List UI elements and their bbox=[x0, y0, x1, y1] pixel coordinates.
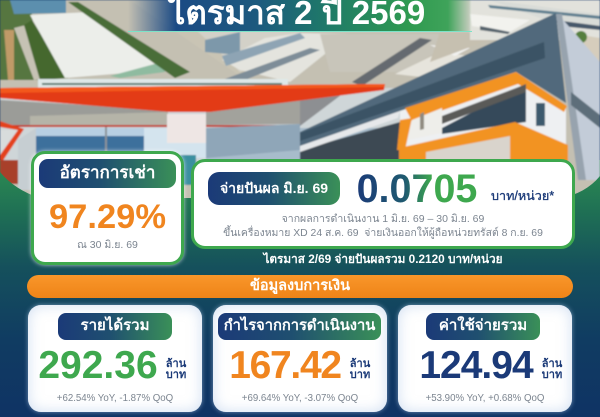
panel: total expenses bbox=[398, 305, 572, 412]
building right bbox=[206, 128, 378, 159]
heading: total revenue: รายได้รวม bbox=[81, 317, 149, 334]
heading: financial data bar: ข้อมูลงบการเงิน bbox=[250, 278, 350, 294]
heading: total revenue bbox=[58, 313, 172, 340]
value: profit: 167.42 bbox=[229, 344, 341, 387]
heading: operating profit: กำไรจากการดำเนินงาน bbox=[224, 318, 375, 334]
note: as of date: ณ 30 มิ.ย. 69 bbox=[77, 239, 138, 251]
heading: total expenses: ค่าใช้จ่ายรวม bbox=[439, 317, 527, 334]
text: XD and payment dates: ขึ้นเครื่องหมาย XD 24 ส.ค. 69 จ่ายเงินออกให้ผู้ถือหน่วยทรัสต์ 8 ก.ย. 69 bbox=[223, 228, 543, 239]
unit: baht per unit: บาท/หน่วย* bbox=[491, 189, 554, 203]
heading: financial data bar bbox=[27, 275, 573, 298]
note: revenue change: +62.54% YoY, -1.87% QoQ bbox=[57, 393, 173, 404]
unit: million baht: ล้าน bbox=[350, 358, 370, 370]
panel: distribution bbox=[191, 159, 575, 249]
gate and canopy bbox=[0, 88, 401, 162]
note: expenses change: +53.90% YoY, +0.68% QoQ bbox=[426, 393, 544, 404]
heading: total expenses bbox=[426, 313, 540, 340]
value: distribution per unit: 0.0705 bbox=[357, 167, 477, 211]
panel: total revenue bbox=[28, 305, 202, 412]
unit: million baht: บาท bbox=[350, 369, 370, 381]
heading: occupancy rate: อัตราการเช่า bbox=[60, 163, 155, 182]
unit: million baht: บาท bbox=[542, 369, 562, 381]
background gradient bbox=[0, 160, 600, 417]
text: operating period: จากผลการดำเนินงาน 1 มิ.ย. 69 – 30 มิ.ย. 69 bbox=[282, 213, 484, 225]
panel: occupancy rate bbox=[31, 151, 184, 265]
unit: million baht bbox=[166, 358, 186, 381]
unit: million baht bbox=[350, 358, 370, 381]
value: expenses: 124.94 bbox=[419, 344, 533, 387]
unit: million baht bbox=[542, 358, 562, 381]
note: profit change: +69.64% YoY, -3.07% QoQ bbox=[242, 393, 358, 404]
unit: million baht: ล้าน bbox=[166, 358, 186, 370]
unit: million baht: ล้าน bbox=[542, 358, 562, 370]
unit: million baht: บาท bbox=[166, 369, 186, 381]
heading: occupancy rate bbox=[39, 159, 176, 188]
value: revenue: 292.36 bbox=[38, 344, 158, 387]
photo: logistics warehouse bbox=[0, 0, 600, 198]
aerial ground bbox=[0, 0, 600, 205]
value: occupancy: 97.29% bbox=[49, 198, 166, 236]
panel: operating profit bbox=[213, 305, 387, 412]
text: Q2 total distribution: ไตรมาส 2/69 จ่ายปันผลรวม 0.2120 บาท/หน่วย bbox=[263, 252, 503, 266]
heading: distribution June 69 bbox=[208, 172, 340, 205]
heading: operating profit bbox=[218, 313, 381, 340]
heading: distribution June 69: จ่ายปันผล มิ.ย. 69 bbox=[220, 180, 328, 196]
